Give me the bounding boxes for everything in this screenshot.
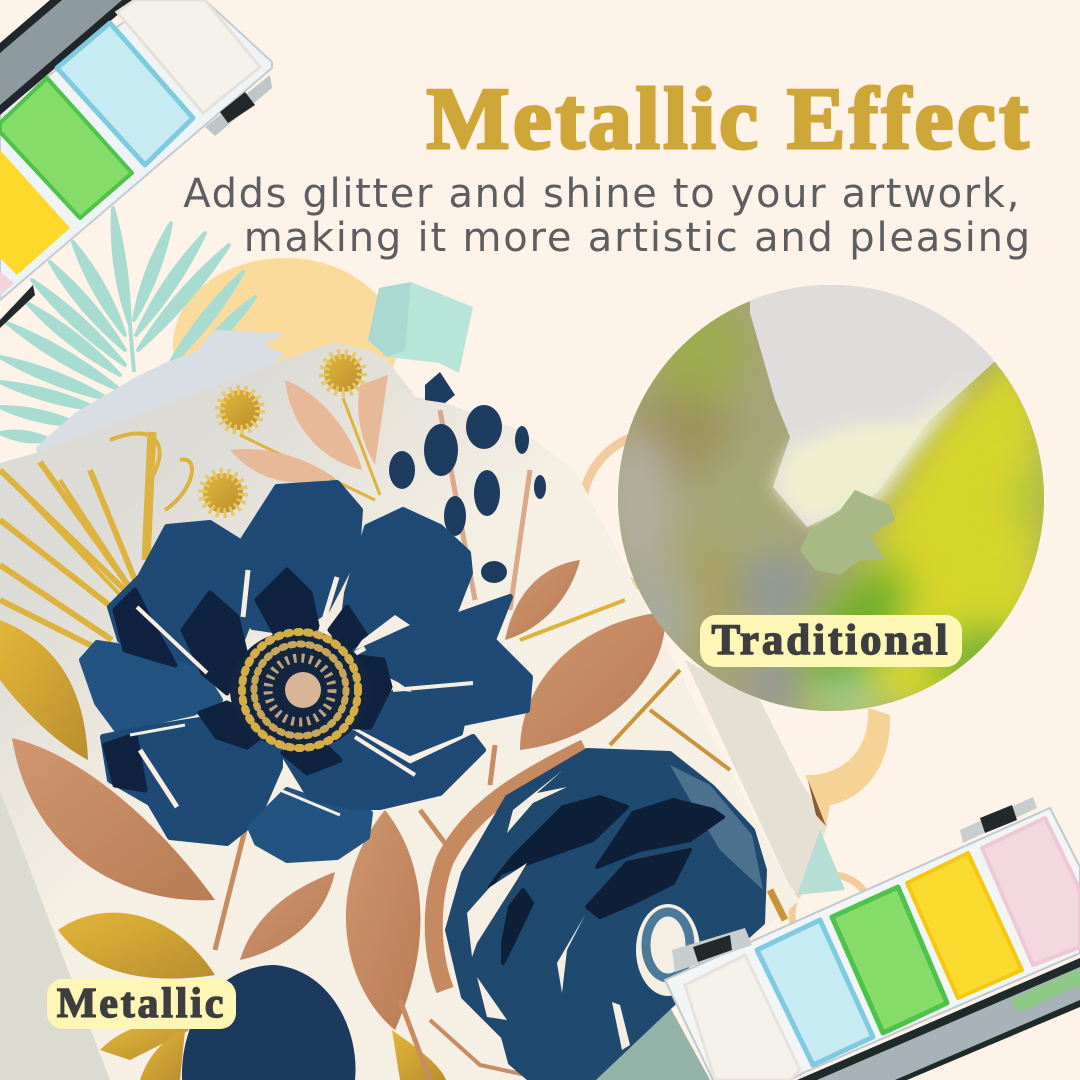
brush tube	[0, 0, 135, 115]
green wash	[786, 475, 1044, 718]
navy flower lower	[182, 965, 356, 1080]
navy flower top	[82, 483, 530, 860]
decoration: sun	[173, 258, 397, 432]
paper sheet	[0, 343, 800, 1080]
dark petal shadows	[105, 570, 390, 790]
navy rose bottom right	[447, 750, 765, 1080]
white petal streaks	[130, 570, 473, 815]
label: metallic: Metallic	[57, 981, 226, 1027]
gold line fronds	[0, 398, 785, 920]
navy buds	[389, 372, 546, 583]
decoration: lower left background	[0, 790, 110, 1080]
palette: top left	[0, 0, 272, 328]
decoration: beige paper back and mint	[590, 660, 845, 1080]
paint pans	[117, 0, 260, 113]
photo: traditional watercolor circle	[605, 285, 1044, 718]
tray	[0, 0, 272, 300]
light copper leaves	[230, 375, 388, 483]
painting: metallic floral artwork	[0, 343, 800, 1080]
clips	[0, 75, 272, 328]
brush tube	[797, 958, 1080, 1080]
decoration: mint cube	[368, 282, 473, 373]
left olive washes	[618, 302, 817, 710]
gold leaves and flowers	[0, 354, 446, 1080]
subtitle: making it more artistic and pleasing	[244, 215, 1032, 261]
foliage silhouette	[800, 490, 895, 575]
copper leaves	[12, 560, 665, 1030]
decoration: palm leaf	[0, 208, 255, 441]
subtitle: Adds glitter and shine to your artwork,	[183, 171, 1021, 217]
paper white zone	[750, 285, 994, 527]
flower petals	[82, 483, 530, 860]
clips	[672, 797, 1037, 972]
decoration: torn grey paper	[36, 330, 285, 470]
paint pans	[685, 955, 800, 1080]
tray	[665, 808, 1080, 1080]
flower center	[230, 630, 370, 750]
copper stems	[215, 410, 585, 1080]
decoration: copper rings	[582, 432, 872, 955]
palette: bottom right	[665, 797, 1080, 1080]
subtitle	[183, 171, 1032, 261]
label: traditional: Traditional	[712, 617, 950, 664]
title: Metallic Effect	[426, 71, 1032, 168]
decoration: ribbon	[805, 708, 890, 826]
yellow wash	[800, 340, 1044, 711]
